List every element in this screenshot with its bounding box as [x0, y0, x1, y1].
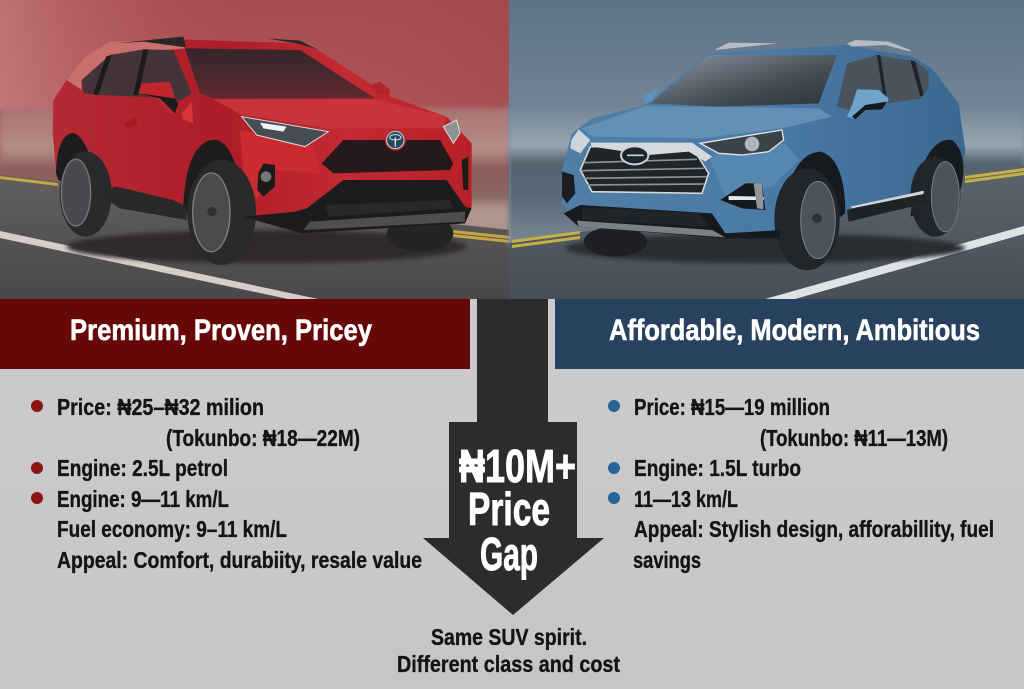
wheel: rear [910, 157, 960, 237]
list text: savings [633, 547, 701, 573]
bullets [31, 400, 43, 504]
logo: Toyota emblem [385, 129, 406, 151]
side windows [82, 49, 192, 100]
roof rails [715, 43, 779, 50]
logo: brand emblem [621, 146, 648, 164]
fog lamp [257, 163, 275, 197]
side mirror [138, 82, 178, 113]
headlight [242, 117, 328, 147]
tagline: Different class and cost [397, 651, 620, 677]
list text [633, 394, 994, 573]
front grille [580, 147, 709, 193]
wheel: far front [584, 227, 647, 257]
photo: blue SUV on road [509, 0, 1024, 299]
left header banner [0, 299, 470, 369]
wheel arch [784, 152, 845, 230]
right spec list [608, 394, 994, 573]
central price gap arrow [423, 299, 604, 615]
list text: Engine: 9—11 km/L [57, 486, 229, 512]
front grille [322, 140, 453, 173]
list text: 11—13 km/L [634, 486, 738, 512]
list text: Price: ₦15—19 million [634, 394, 830, 420]
wheel: far front [387, 215, 453, 252]
arrow label: ₦10M+ [459, 440, 576, 492]
headlight [700, 130, 784, 155]
arrow label: Gap [480, 528, 538, 580]
door handles [124, 117, 137, 128]
list text: Engine: 2.5L petrol [57, 455, 228, 481]
list text: Price: ₦25–₦32 milion [57, 394, 264, 420]
wheel: front [187, 160, 256, 265]
side mirror [847, 89, 889, 119]
heading: premium: Premium, Proven, Pricey [70, 314, 372, 347]
list text: (Tokunbo: ₦18—22M) [166, 425, 360, 451]
bullets [608, 400, 620, 504]
side sill [95, 187, 187, 220]
tagline: Same SUV spirit. [431, 624, 587, 650]
wheel arch [183, 140, 242, 213]
wheel: front [774, 168, 840, 270]
car body [53, 39, 472, 233]
arrow label [459, 440, 576, 580]
arrow label: Price [468, 483, 550, 535]
list text: Appeal: Comfort, durabiity, resale value [57, 547, 422, 573]
lower bumper [243, 180, 472, 233]
side sill [847, 190, 925, 222]
wheel: rear [60, 151, 112, 237]
lower bumper [564, 205, 782, 238]
photo: red SUV on road [0, 0, 510, 299]
fog lamp [720, 183, 765, 210]
car body [562, 45, 965, 238]
side windows [837, 55, 929, 110]
list text: Fuel economy: 9–11 km/L [57, 516, 287, 542]
windscreen [650, 55, 837, 107]
list text [57, 394, 422, 573]
list text: Engine: 1.5L turbo [634, 455, 801, 481]
right header banner [555, 299, 1024, 369]
left spec list [31, 394, 422, 573]
list text: (Tokunbo: ₦11—13M) [760, 425, 948, 451]
windscreen [185, 48, 375, 98]
tagline [397, 624, 620, 677]
